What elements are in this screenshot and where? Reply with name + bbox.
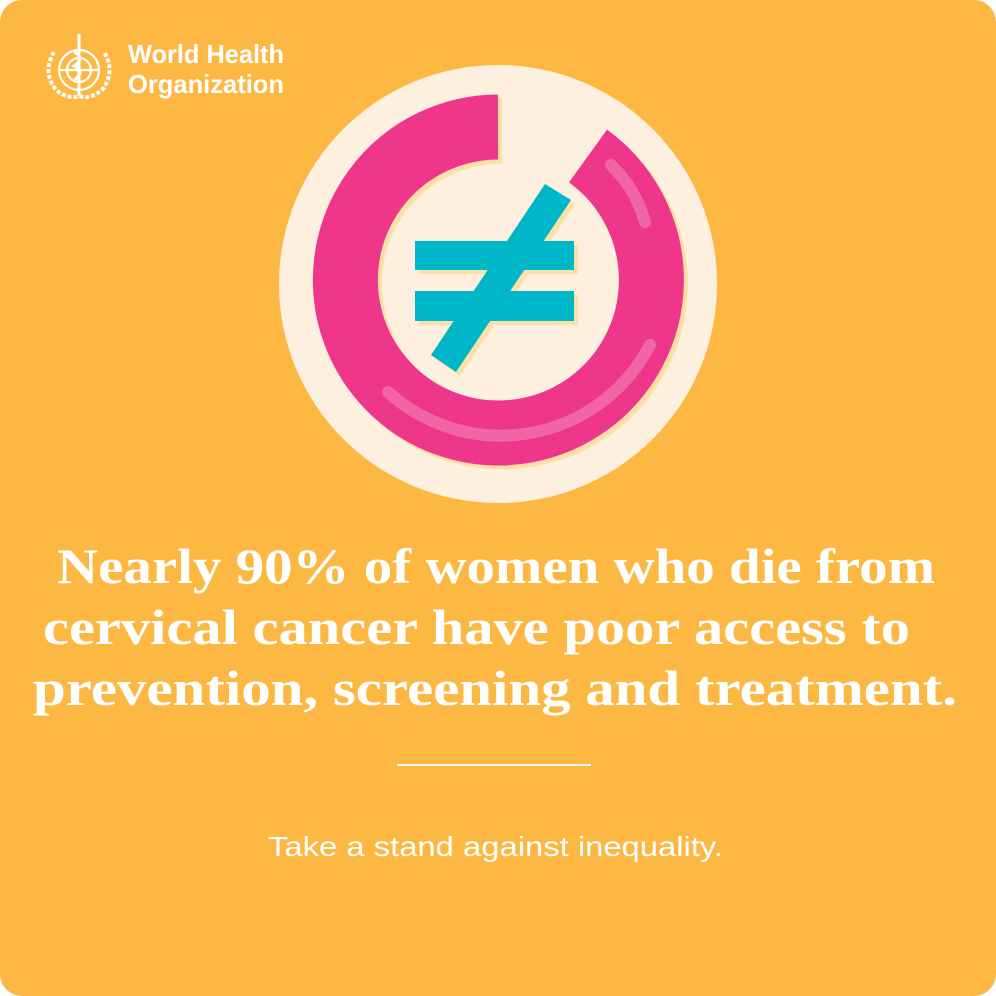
logo: WHO: [46, 34, 284, 100]
cream circle: [279, 65, 717, 503]
logo: WHO: Organization: [128, 69, 284, 99]
headline text: Nearly 90% of women who die from: [57, 538, 935, 594]
icon: inequality ring: [279, 65, 717, 503]
divider line: [397, 764, 591, 766]
not-equal sign: [415, 184, 578, 376]
headline text: cervical cancer have poor access to: [43, 599, 910, 655]
pink ring: [345, 127, 651, 433]
headline text: [33, 538, 957, 716]
icon: WHO emblem: [48, 34, 110, 97]
ring shadow: [349, 131, 655, 437]
subtitle: Take a stand against inequality.: [268, 831, 723, 862]
ring highlights: [611, 165, 645, 222]
headline text: prevention, screening and treatment.: [33, 660, 957, 716]
logo text: World Health: [128, 39, 284, 69]
